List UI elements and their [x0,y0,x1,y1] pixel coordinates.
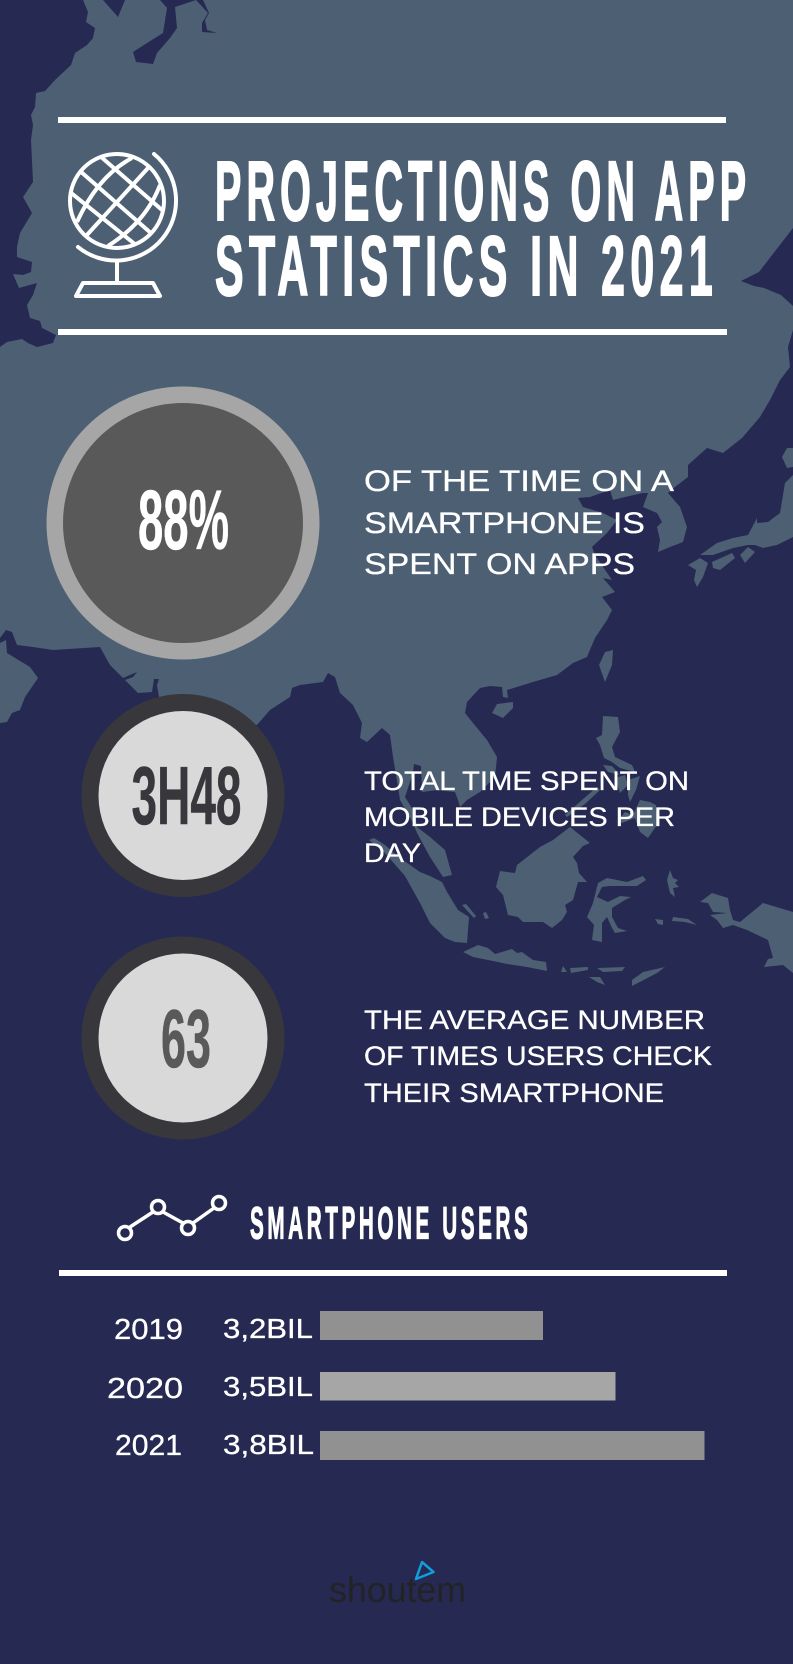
stat text: checks: THE AVERAGE NUMBER [364,1005,705,1035]
row 2020: 2020 [107,1373,183,1405]
bar chart: smartphone users by year [107,1311,704,1462]
stat text: mobile time: MOBILE DEVICES PER [364,802,675,832]
title: PROJECTIONS ON APP [215,144,746,238]
row 2020 [107,1371,616,1405]
stat badge: 63 [82,936,284,1140]
heading: smartphone users: SMARTPHONE USERS [250,1199,528,1249]
stat badge: 3H48 [82,694,284,897]
row 2021: 3,8BIL [223,1429,314,1460]
background map of Asia [0,0,793,986]
section rule [59,1270,727,1276]
row 2020: 3,5BIL [223,1371,313,1402]
stat text: time on apps: SPENT ON APPS [364,548,635,581]
title: STATISTICS IN 2021 [215,221,713,314]
title [215,144,746,314]
stat badge: 63: 63 [161,992,211,1085]
stat text: checks [364,1005,712,1108]
icon: line chart [118,1196,226,1240]
row 2021 [115,1429,704,1462]
stat text: time on apps: SMARTPHONE IS [364,507,645,540]
row 2019 [114,1311,543,1346]
stat text: mobile time [364,766,689,868]
row 2021: 2021 [115,1430,182,1462]
row 2019: 3,2BIL [223,1313,313,1344]
stat text: checks: THEIR SMARTPHONE [364,1078,664,1108]
stat text: time on apps [364,465,674,581]
stat text: mobile time: DAY [364,838,421,868]
logo: shoutem: shoutem [329,1569,466,1610]
header top rule [58,117,726,123]
stat text: checks: OF TIMES USERS CHECK [364,1041,712,1071]
stat badge: 88%: 88% [138,473,229,567]
stat text: mobile time: TOTAL TIME SPENT ON [364,766,689,796]
stat text: time on apps: OF THE TIME ON A [364,465,674,498]
stat badge: 88% [46,386,320,660]
header bottom rule [58,329,727,335]
icon: globe [70,154,176,296]
row 2019: 2019 [114,1314,183,1346]
stat badge: 3H48: 3H48 [132,749,242,842]
